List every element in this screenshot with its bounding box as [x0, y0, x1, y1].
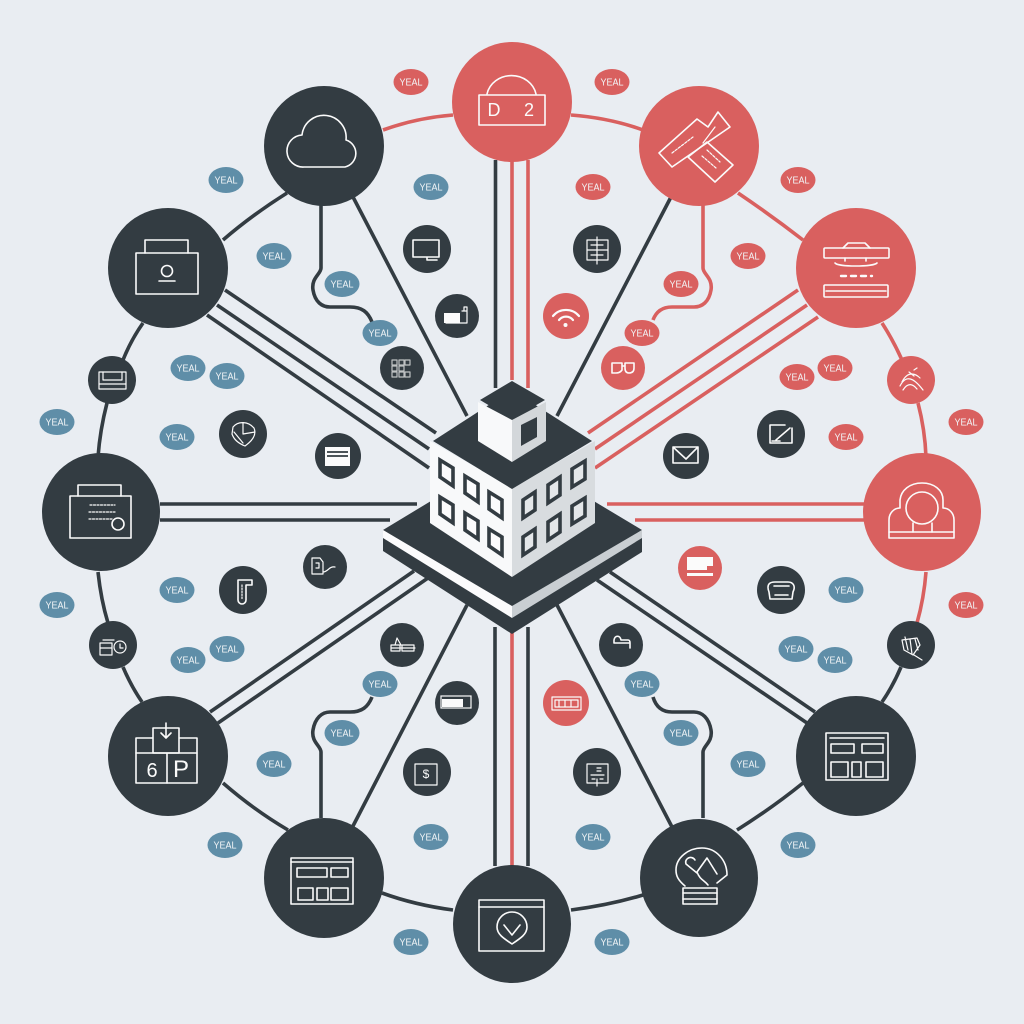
pill: [780, 832, 816, 858]
spoke lines: right: [607, 504, 864, 520]
central building on platform: [383, 381, 642, 634]
pill: YEAL: [834, 586, 858, 596]
small node: ring left upper: [88, 356, 136, 404]
pill: [324, 720, 360, 746]
pill: YEAL: [262, 252, 286, 262]
small icon: QR grid: [380, 346, 424, 390]
pill: YEAL: [330, 728, 354, 740]
small icon: note and pencil: [757, 410, 805, 458]
pill: [394, 69, 428, 95]
pill: [362, 320, 398, 346]
pill: YEAL: [786, 840, 810, 852]
pill: [208, 832, 242, 858]
small icon: tool: [435, 294, 479, 338]
pill: [256, 751, 292, 777]
pill: [576, 174, 610, 200]
pill: YEAL: [954, 600, 978, 612]
node: briefcase: [108, 208, 228, 328]
building windows: [440, 460, 585, 555]
spoke lines: upper left: [207, 197, 467, 468]
pill: YEAL: [824, 656, 847, 666]
pill: YEAL: [834, 432, 858, 444]
small node: ring right upper: [887, 356, 935, 404]
node: crossed tickets: [639, 86, 759, 206]
small node: ring right lower: [887, 621, 935, 669]
node: folder card: [42, 453, 160, 571]
pill: YEAL: [736, 252, 760, 262]
small icon: monitor: [403, 225, 451, 273]
spoke lines: lower left: [210, 571, 467, 826]
pill: YEAL: [670, 728, 693, 740]
node: head profile: [640, 819, 758, 937]
spoke lines: top group: [496, 160, 528, 388]
node: browser window bottom: [453, 865, 571, 983]
spoke lines: left: [160, 504, 417, 520]
pill: YEAL: [582, 182, 605, 194]
small icon: circuit: [573, 748, 621, 796]
pill: YEAL: [262, 760, 286, 770]
small icon: glasses tool: [380, 623, 424, 667]
pill: [730, 751, 766, 777]
pill: YEAL: [330, 280, 354, 290]
pill: [394, 929, 428, 955]
small icon: globe: [219, 410, 267, 458]
label pills: red: [394, 69, 984, 618]
pill: [40, 409, 74, 435]
small icon: envelope: [663, 433, 709, 479]
node: dashboard lower right: [796, 696, 916, 816]
outer ring connector: dark segments: [98, 193, 901, 910]
pill: [160, 577, 194, 603]
pill: [40, 592, 74, 618]
node: calendar box: 6: [146, 760, 158, 782]
pill: YEAL: [216, 644, 239, 656]
pill: YEAL: [582, 832, 605, 844]
node: calendar box: P: [173, 756, 189, 783]
small icon: bed: [599, 623, 643, 667]
platform: [383, 452, 642, 634]
building walls: [430, 390, 595, 577]
pill: [624, 320, 660, 346]
node: top ticket: D: [488, 100, 500, 120]
small node: ring left lower: [89, 621, 137, 669]
small icon: test tube: [219, 566, 267, 614]
node: top ticket: 2: [524, 100, 534, 120]
pill: [818, 647, 852, 673]
pill: [576, 824, 610, 850]
pill: [948, 592, 984, 618]
small icon: device: [757, 566, 805, 614]
pill: [594, 69, 630, 95]
pill: YEAL: [46, 600, 69, 612]
pill: YEAL: [600, 78, 624, 88]
pill: [210, 363, 244, 389]
pill: YEAL: [216, 372, 239, 382]
pill: [624, 671, 660, 697]
pill: YEAL: [670, 280, 693, 290]
pill: YEAL: [630, 680, 654, 690]
pill: [170, 647, 206, 673]
spoke lines: upper right: [557, 197, 818, 468]
spoke lines: lower right: [557, 572, 815, 827]
spoke lines: bottom: [495, 627, 528, 866]
pill: [828, 424, 864, 450]
pill: [594, 929, 630, 955]
pill: YEAL: [630, 328, 654, 340]
pill: [818, 355, 852, 381]
pill: YEAL: [420, 832, 443, 844]
small icon: tag: [303, 545, 347, 589]
outer ring connector: red segments: [383, 115, 926, 623]
pill: YEAL: [166, 432, 189, 444]
pill: YEAL: [954, 418, 978, 428]
pill: YEAL: [176, 656, 200, 666]
pill: [780, 167, 816, 193]
pill: [324, 271, 360, 297]
pill: [170, 355, 206, 381]
small icon: glasses: [601, 346, 645, 390]
pill: YEAL: [176, 364, 200, 374]
pill: [778, 636, 814, 662]
pill: YEAL: [214, 840, 237, 852]
small icon: battery: [435, 681, 479, 725]
pill: YEAL: [166, 586, 189, 596]
pill: YEAL: [46, 418, 69, 428]
pill: [780, 364, 814, 390]
pill: YEAL: [786, 176, 810, 186]
pill: [664, 271, 698, 297]
pill: [256, 243, 292, 269]
pill: YEAL: [784, 644, 808, 656]
pill: YEAL: [400, 938, 423, 948]
node: layout panel lower left: [264, 818, 384, 938]
node: cloud: [264, 86, 384, 206]
small icon: book: [573, 225, 621, 273]
pill: [664, 720, 698, 746]
node: calendar box: [108, 696, 228, 816]
pill: [414, 174, 448, 200]
pill: YEAL: [824, 364, 847, 374]
pill: [948, 409, 984, 435]
pill: YEAL: [368, 680, 392, 690]
node: top ticket: [452, 42, 572, 162]
node: arch: [863, 453, 981, 571]
small icon: card red: [678, 546, 722, 590]
pill: [160, 424, 194, 450]
pill: [730, 243, 766, 269]
pill: [208, 167, 244, 193]
pill: [828, 577, 864, 603]
label pills: blue: [40, 167, 864, 955]
node: printer: [796, 208, 916, 328]
pill: YEAL: [368, 328, 392, 340]
small icon: wifi: [543, 293, 589, 339]
small icon: panel red: [543, 680, 589, 726]
pill: YEAL: [736, 760, 760, 770]
pill: YEAL: [600, 938, 624, 948]
pill: YEAL: [420, 182, 443, 194]
pill: [210, 636, 244, 662]
pill: [414, 824, 448, 850]
pill: YEAL: [214, 176, 238, 186]
small icon: dollar square: $: [423, 767, 430, 781]
small icon: dollar square: [403, 748, 451, 796]
pill: [362, 671, 398, 697]
small icon: card: [315, 433, 361, 479]
pill: YEAL: [400, 78, 423, 88]
roof cube: [478, 381, 546, 462]
pill: YEAL: [786, 372, 809, 384]
